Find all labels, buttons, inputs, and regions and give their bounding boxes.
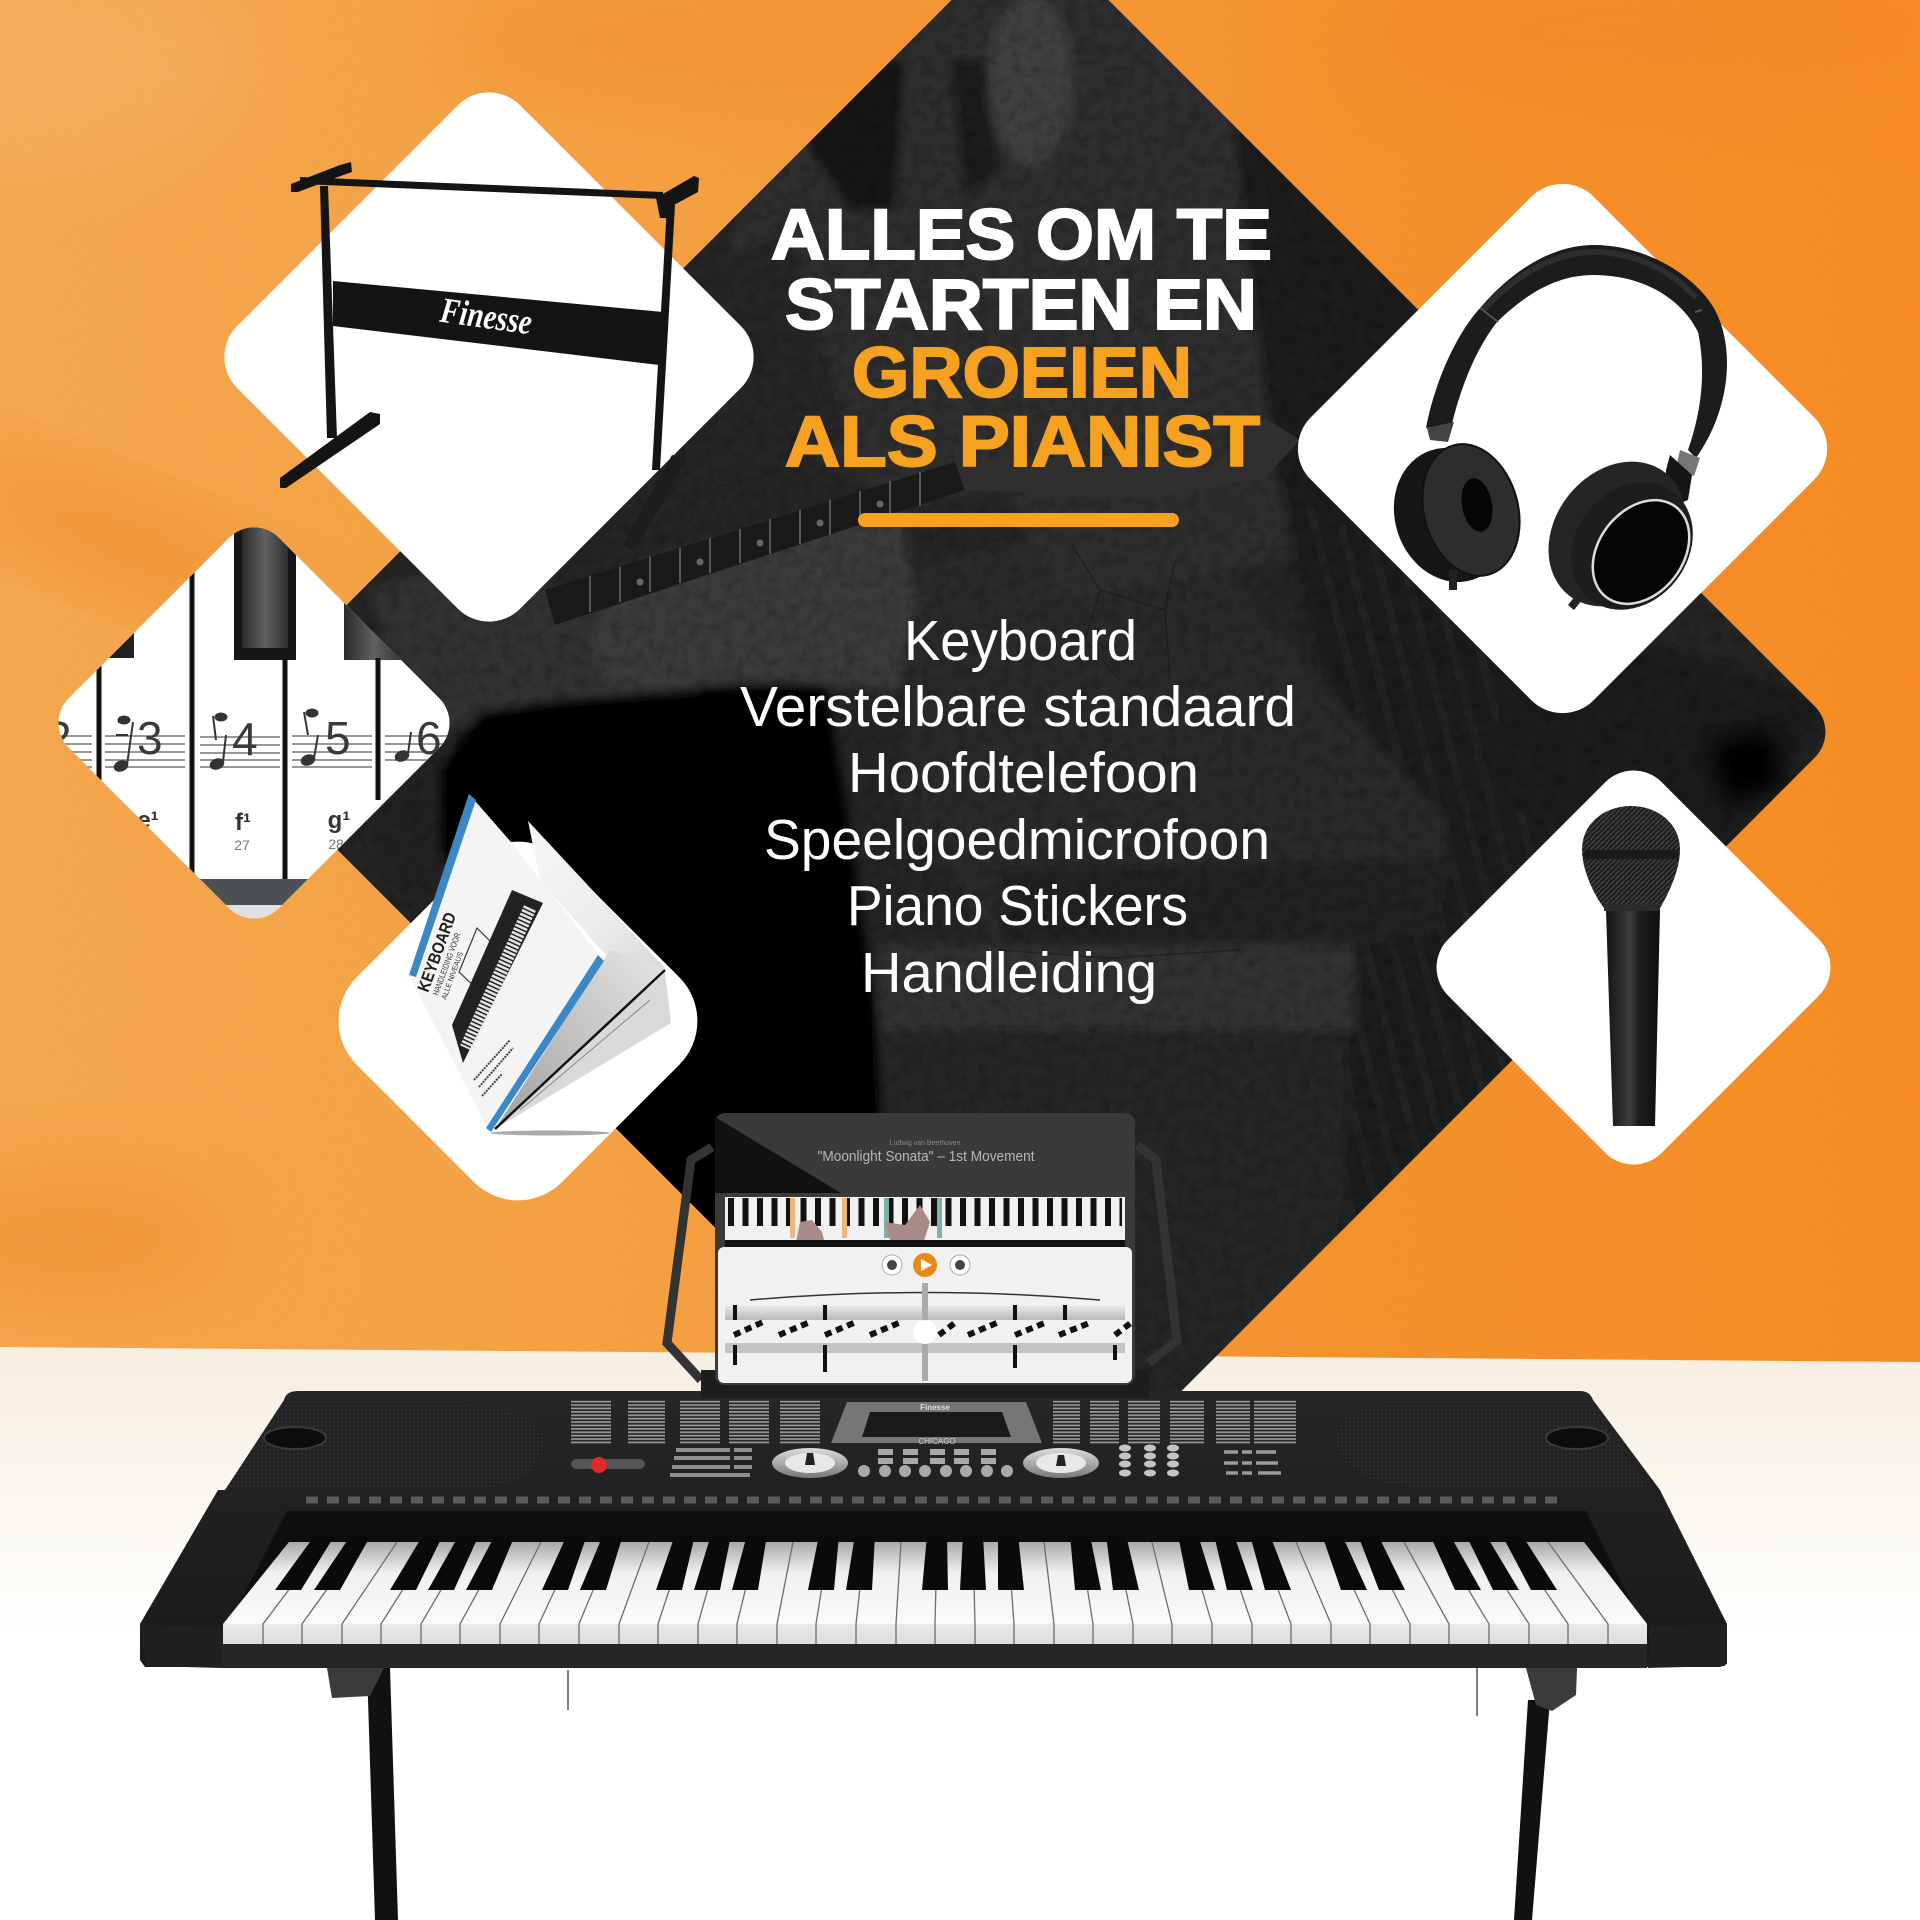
list item: keyboard: Keyboard [904, 609, 1137, 673]
manual tile background [313, 816, 723, 1226]
left control buttons [670, 1450, 752, 1475]
display logo: Finesse [920, 1403, 950, 1412]
photo: arm and hand [590, 490, 915, 690]
tablet [715, 1113, 1135, 1385]
photo: guitar body [370, 560, 700, 730]
tablet shadow wedge [715, 1117, 841, 1193]
key numbers: 27 [234, 837, 250, 853]
left knob [772, 1448, 848, 1478]
note numbers: 6 [416, 712, 442, 764]
note numbers: 2 [46, 712, 72, 764]
title line 4: ALS PIANIST [785, 403, 1260, 482]
panel: microphone tile [1420, 754, 1847, 1181]
photo: stone pillar [870, 480, 1445, 1560]
power button [571, 1457, 645, 1473]
title line 1: ALLES OM TE [771, 196, 1272, 275]
key gaps [99, 570, 378, 880]
black bar [725, 1240, 1125, 1247]
key numbers: 28 [328, 836, 344, 852]
left hand [795, 1220, 826, 1247]
photo: black trousers [440, 684, 885, 1260]
tablet composer: Ludwig van Beethoven [890, 1140, 961, 1147]
front rail [223, 1644, 1647, 1668]
panel: stand tile [206, 74, 772, 640]
photo: shirt and face [690, 0, 1420, 560]
tablet frame [715, 1113, 1135, 1385]
book fine print [474, 1040, 513, 1096]
centre control buttons [858, 1449, 1013, 1477]
book subtitle: HANDLEIDING VOOR [430, 931, 462, 997]
orange wall background [0, 0, 1920, 1370]
left ear cup [1377, 433, 1534, 597]
bottom rail [60, 879, 440, 905]
white key gaps [263, 1542, 1608, 1644]
panel: manual tile [313, 794, 723, 1226]
playback controls [882, 1253, 970, 1277]
tablet heading: "Moonlight Sonata" – 1st Movement [818, 1149, 1034, 1165]
microphone tile background [1420, 754, 1847, 1181]
right end cap front [1648, 1624, 1727, 1668]
tablet lower sheet [718, 1247, 1132, 1383]
left end cap front [140, 1624, 223, 1668]
black piano keys [105, 520, 404, 660]
icon: headphones [1377, 245, 1727, 634]
title [771, 196, 1272, 482]
note names: g¹ [328, 807, 350, 834]
display bezel [831, 1402, 1042, 1443]
display model label: CHICAGO [918, 1437, 956, 1446]
panel: headphones tile [1280, 166, 1845, 731]
white keys [223, 1542, 1647, 1644]
note names: e¹ [137, 807, 159, 834]
photo: dark corner right [1500, 600, 1840, 900]
contents list [740, 609, 1296, 1005]
photo: guitar neck [545, 418, 1300, 625]
photo: stone cracks [1000, 545, 1240, 958]
key numbers [234, 836, 344, 853]
right speaker [1337, 1404, 1647, 1487]
voice list left [571, 1400, 820, 1444]
black keys [275, 1535, 1557, 1590]
list item: microphone: Speelgoedmicrofoon [764, 808, 1270, 872]
note names: f¹ [235, 809, 251, 836]
photo: stone texture [382, 0, 1749, 1301]
photo: background ribs right [1270, 480, 1640, 1300]
note numbers: 3 [137, 712, 163, 764]
book title: KEYBOARD [414, 910, 460, 994]
book cover keyboard [452, 890, 543, 1063]
photo: black shadow right [1708, 726, 1785, 805]
panel: sticker tile [58, 528, 450, 918]
headphones tile background [1280, 166, 1845, 731]
sticker keys background [58, 528, 450, 918]
key bed [220, 1511, 1650, 1640]
left jack [264, 1427, 326, 1449]
panel: dark photo diamond [337, 0, 1826, 1391]
title line 3: GROEIEN [852, 334, 1192, 413]
floor [0, 1347, 1920, 1920]
tablet holder [667, 1145, 1177, 1398]
list item: stickers: Piano Stickers [847, 874, 1188, 938]
keyboard [140, 1391, 1727, 1668]
keyboard body [140, 1391, 1727, 1667]
right hand [885, 1205, 930, 1247]
note numbers: 5 [325, 712, 351, 764]
note numbers: 4 [232, 713, 258, 765]
right small buttons [1224, 1452, 1281, 1473]
left speaker [227, 1404, 542, 1487]
right jack [1546, 1427, 1608, 1449]
title line 2: STARTEN EN [785, 266, 1257, 345]
tablet piano [725, 1197, 1125, 1240]
display screen [862, 1412, 1011, 1437]
voice list right [1053, 1400, 1296, 1444]
keyboard stand legs [327, 1668, 1577, 1920]
button row [306, 1496, 1566, 1504]
note numbers [46, 712, 442, 765]
note glyphs [113, 709, 411, 773]
note names [137, 807, 350, 836]
list item: headphones: Hoofdtelefoon [848, 741, 1199, 805]
sheet music [725, 1283, 1132, 1381]
staff lines [60, 736, 450, 767]
right knob [1023, 1448, 1099, 1478]
stand logo: Finesse [437, 290, 535, 342]
icon: manual book [409, 794, 671, 1136]
photo: rock left [330, 720, 620, 1200]
number pad [1119, 1444, 1179, 1476]
icon: microphone [1582, 806, 1680, 1126]
list item: manual: Handleiding [861, 941, 1157, 1005]
stand tile background [206, 74, 772, 640]
icon: keyboard stand [280, 162, 699, 552]
title divider [858, 513, 1179, 527]
book note: ALLE NIVEAUS [439, 951, 465, 1001]
book cover envelope graphic [459, 928, 494, 988]
list item: stand: Verstelbare standaard [740, 675, 1296, 739]
right ear cup [1520, 434, 1718, 634]
